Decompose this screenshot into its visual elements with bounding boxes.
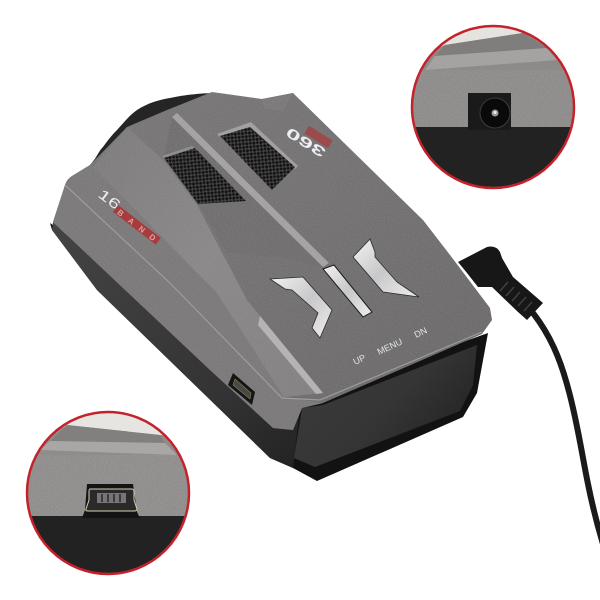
recessed panel — [164, 117, 323, 267]
lighter band — [40, 441, 177, 455]
button labels — [352, 325, 429, 367]
button: menu — [323, 265, 372, 317]
button: up — [270, 277, 332, 338]
USB socket — [82, 484, 140, 518]
label: 360 — [282, 117, 333, 161]
surface grain — [50, 85, 495, 435]
black housing — [32, 516, 184, 573]
label: 16 BAND: 16 — [95, 186, 124, 213]
lighter band — [425, 48, 557, 70]
rear tab — [262, 93, 293, 111]
plug and strain relief — [458, 247, 543, 320]
darker band — [435, 33, 547, 56]
cable — [533, 313, 600, 544]
black base — [50, 223, 488, 481]
device — [50, 85, 495, 481]
darker band — [50, 425, 165, 443]
speckle — [25, 455, 195, 517]
front screen — [294, 345, 477, 467]
side USB port — [228, 373, 255, 405]
black rear hump — [90, 93, 240, 190]
button labels: DN — [413, 325, 429, 340]
callout: mini USB — [25, 410, 195, 586]
relief ribs — [500, 282, 532, 311]
light wedge facet — [93, 127, 323, 397]
label: 360: 360 — [282, 124, 329, 161]
pale top edge — [62, 413, 163, 436]
right grill — [217, 122, 298, 190]
callout: power jack — [410, 25, 580, 197]
power cord — [458, 247, 600, 544]
left shoulder facet — [53, 165, 323, 430]
crease line — [65, 185, 482, 400]
label: 16 BAND: BAND — [115, 208, 158, 243]
button labels: MENU — [376, 337, 404, 357]
lower strip highlight — [258, 316, 323, 394]
button labels: UP — [352, 352, 367, 367]
top shell — [53, 92, 492, 430]
button: down — [353, 239, 419, 297]
left grill — [162, 146, 246, 204]
label: 16 BAND — [95, 186, 161, 245]
jack socket — [468, 93, 511, 130]
speckle — [410, 70, 580, 128]
ridge highlight — [172, 113, 329, 267]
dark side wall — [52, 222, 300, 468]
black housing — [416, 127, 570, 187]
pale top edge — [440, 27, 522, 47]
